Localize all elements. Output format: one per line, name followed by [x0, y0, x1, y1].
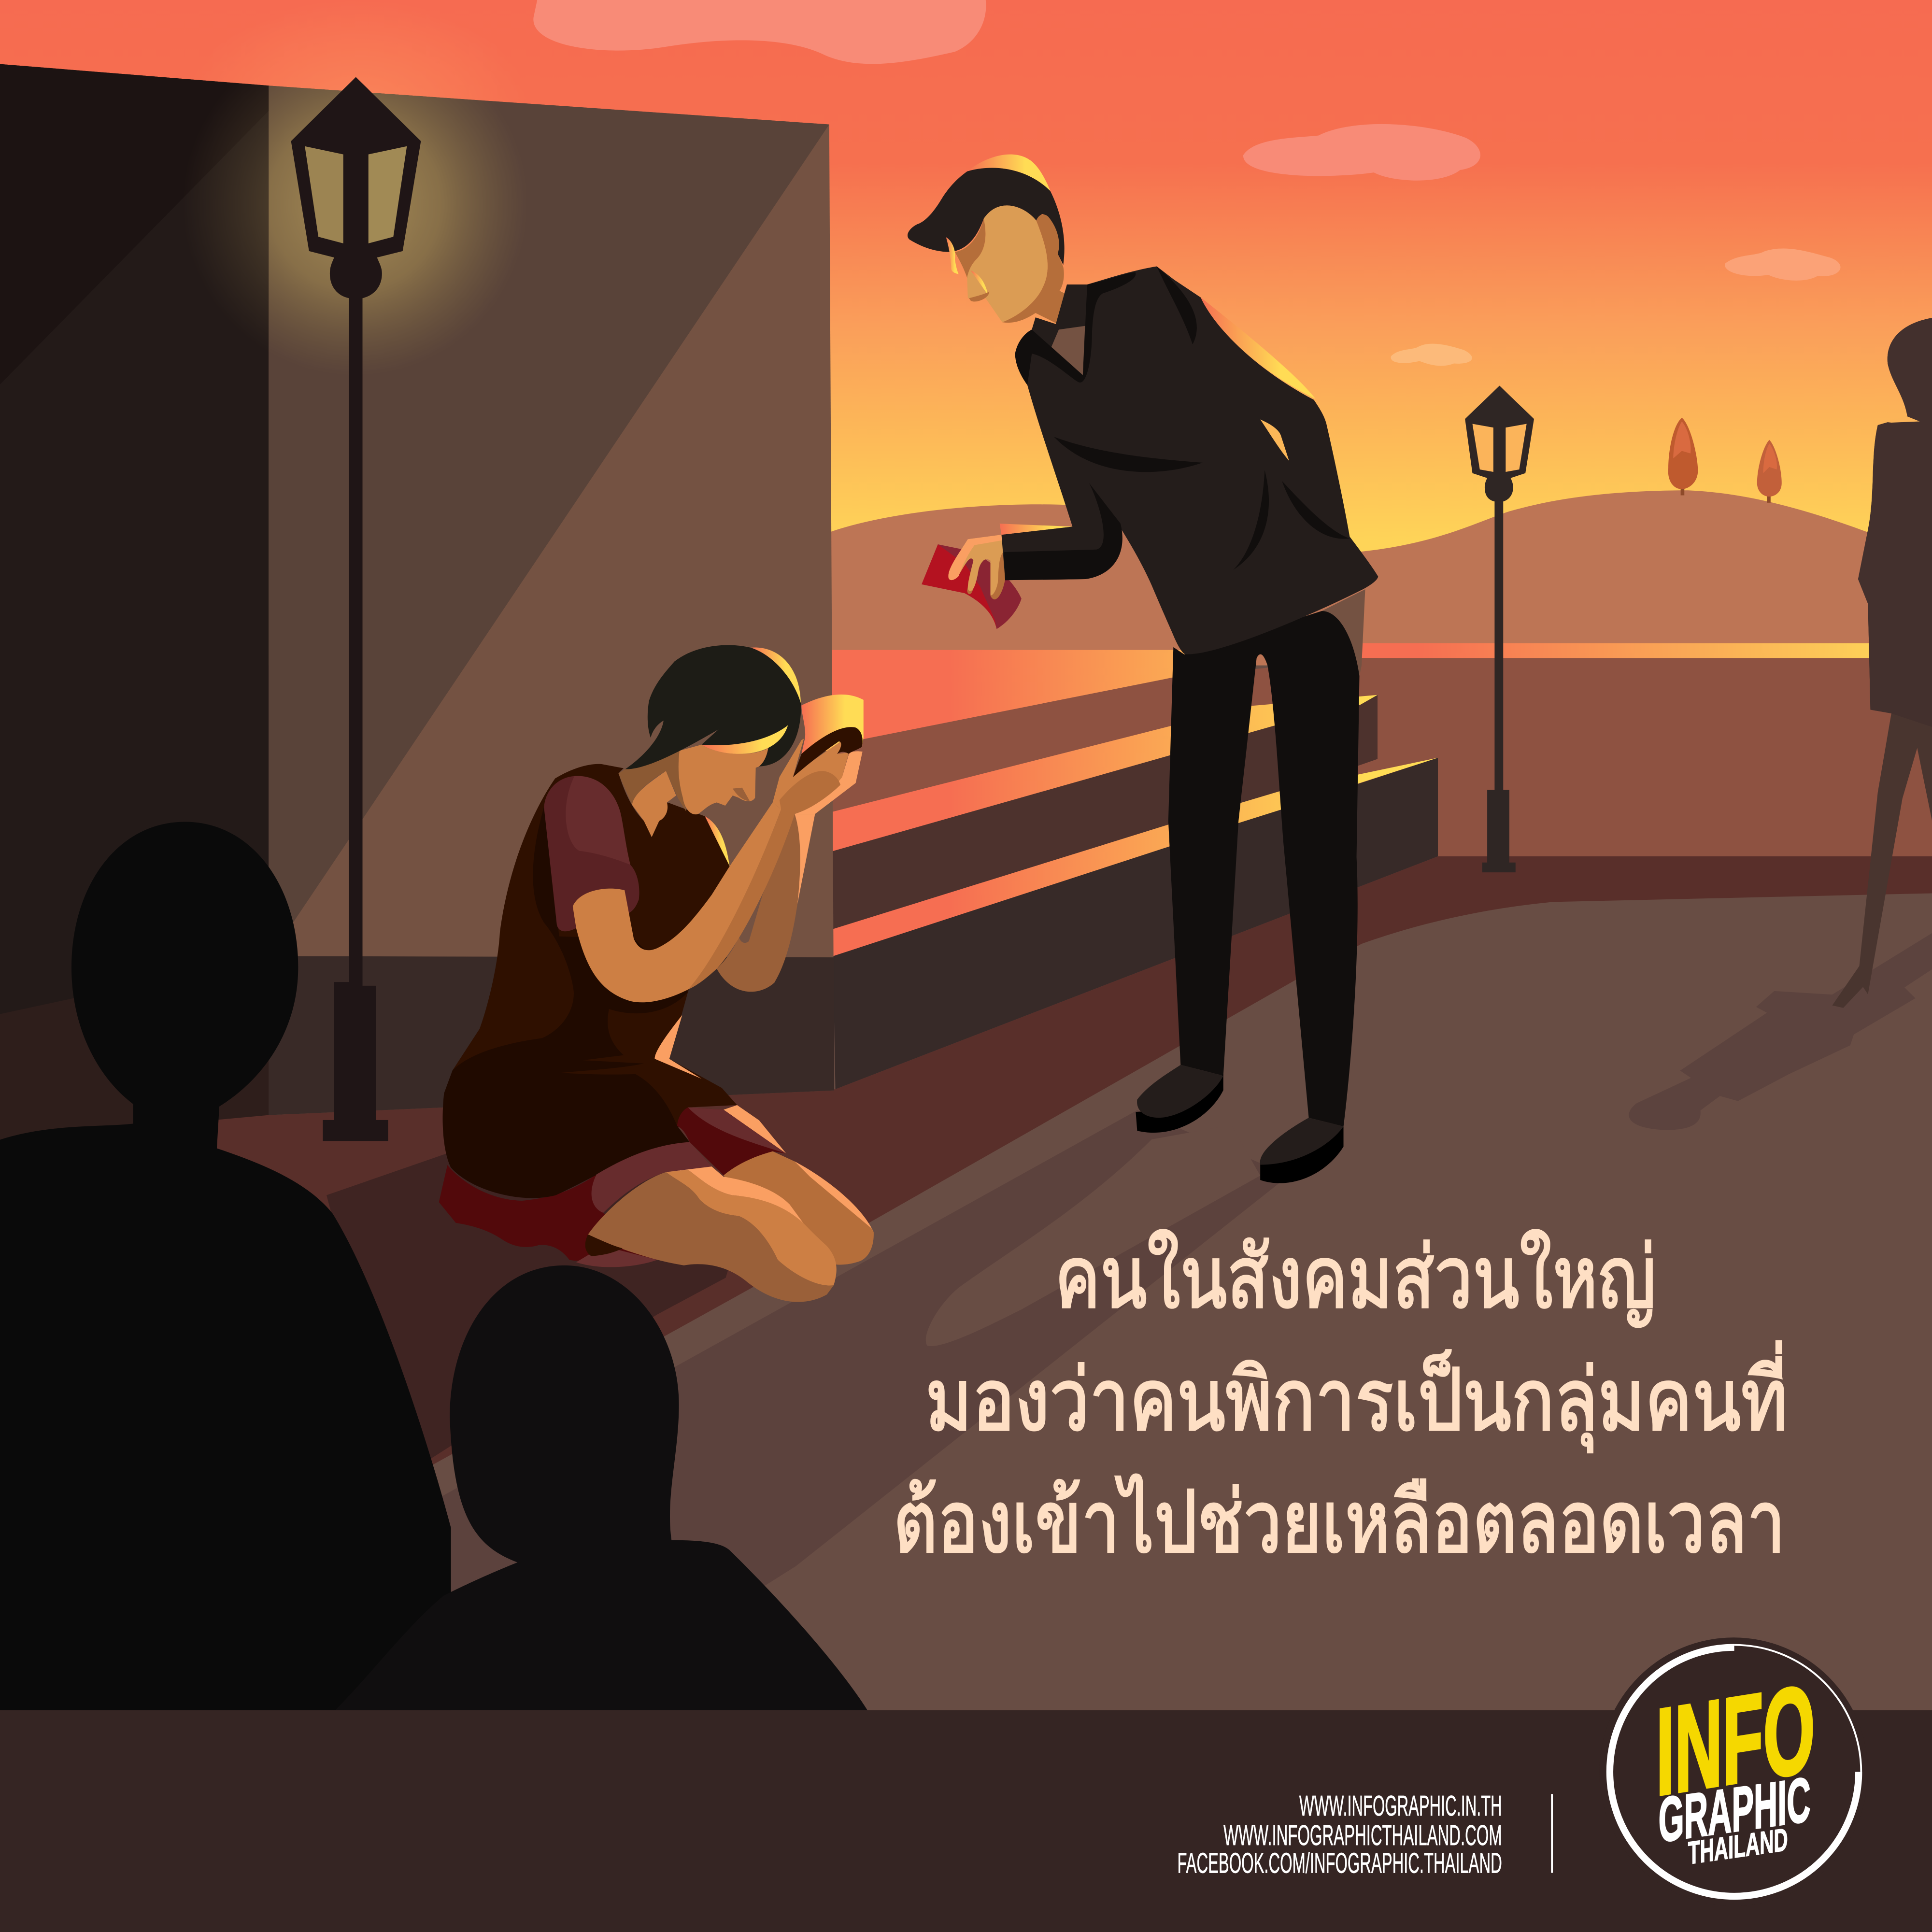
logo: GRAPHIC: [1659, 1764, 1811, 1856]
man neck: [1036, 291, 1067, 324]
footer divider: [1551, 1794, 1553, 1873]
sleeve: [544, 776, 639, 931]
horizon light stripe: [1355, 643, 1873, 659]
man upper body: [908, 155, 1378, 654]
footer links: FACEBOOK.COM/INFOGRAPHIC.THAILAND: [1178, 1847, 1502, 1879]
neck: [619, 751, 686, 837]
front arm: [573, 802, 795, 1002]
banknote: [922, 544, 1022, 629]
main Thai message: [893, 1229, 1788, 1570]
sea horizon: [829, 650, 1187, 761]
stepped wall: [832, 658, 1438, 1089]
right shin: [724, 1151, 874, 1264]
sky glow above lamp: [185, 0, 530, 222]
road: [419, 893, 1932, 1713]
trees: [1668, 418, 1782, 503]
clouds: [533, 0, 1841, 366]
building right wall: [269, 85, 834, 1115]
knee skirt: [592, 1142, 711, 1213]
logo: THAILAND: [1688, 1821, 1788, 1871]
man hand: [948, 535, 1005, 599]
woman hair: [625, 645, 801, 769]
man hair highlight: [967, 155, 1050, 191]
skirt fold: [677, 1105, 786, 1175]
lamp glow on left wall: [205, 85, 269, 327]
footer links: [1178, 1790, 1502, 1879]
hands: [773, 727, 863, 814]
footer bar: [0, 1710, 1932, 1932]
logo: INFO: [1656, 1659, 1815, 1821]
footer links: WWW.INFOGRAPHICTHAILAND.COM: [1223, 1819, 1502, 1851]
road shadow bands: [327, 1109, 1289, 1602]
man suit jacket: [1000, 267, 1378, 654]
distant figure shadow: [1629, 933, 1932, 1130]
under skirt: [439, 1165, 657, 1261]
distant hills: [829, 490, 1932, 666]
lamp glow on right wall: [269, 86, 507, 355]
street lamp small: [1465, 385, 1534, 872]
man trousers and shoes: [1136, 589, 1365, 1183]
man hair: [908, 168, 1065, 265]
back arm: [717, 814, 815, 992]
back leg: [576, 1246, 657, 1267]
woman face: [679, 745, 768, 814]
front leg: [585, 1166, 837, 1302]
foreground silhouette left: [0, 822, 451, 1713]
foreground silhouette right: [335, 1265, 867, 1710]
chest highlight: [705, 816, 730, 866]
man face: [946, 205, 1067, 324]
main Thai message: คนในสังคมส่วนใหญ่: [1055, 1229, 1656, 1327]
distant standing figure: [1832, 318, 1932, 1008]
dress body: [444, 764, 737, 1167]
logo: [1599, 1637, 1868, 1906]
ground: [0, 856, 1932, 1713]
street lamp large: [291, 77, 421, 1141]
kneeling woman: [439, 645, 874, 1302]
far promenade wall: [1355, 658, 1932, 858]
thigh light: [655, 1015, 701, 1079]
sky background: [0, 0, 1932, 666]
building left wall: [0, 64, 269, 1140]
dress shading: [443, 807, 690, 1198]
footer links: WWW.INFOGRAPHIC.IN.TH: [1299, 1790, 1502, 1822]
tissue: [801, 695, 864, 754]
